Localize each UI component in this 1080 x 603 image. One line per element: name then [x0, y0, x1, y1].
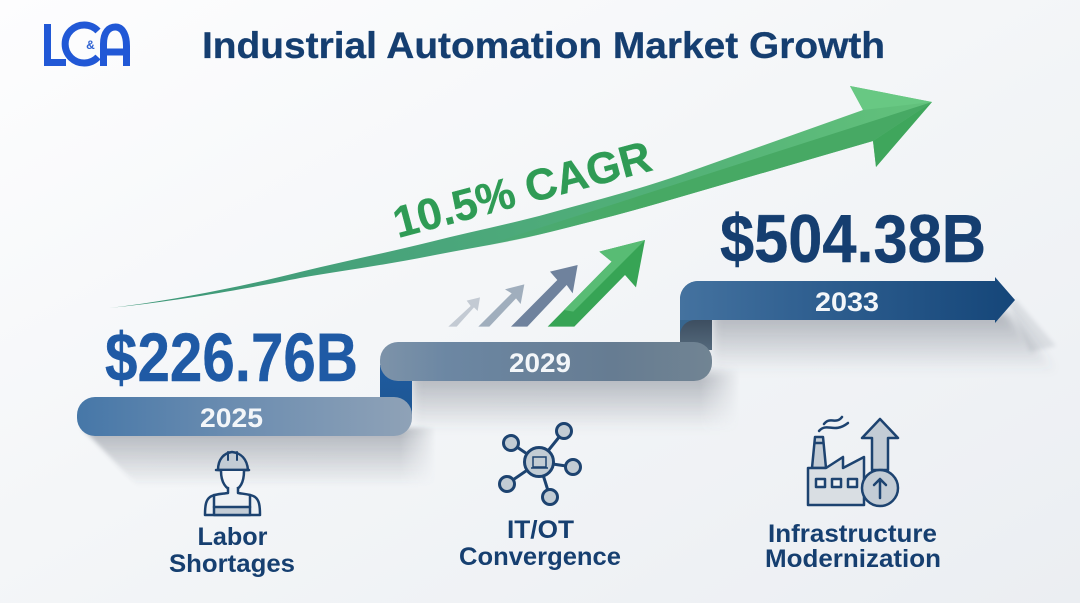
value 2033: $504.38B — [720, 201, 986, 277]
small rising arrows — [448, 240, 645, 327]
logo — [48, 24, 126, 66]
step connector 2029 to 2033 — [680, 281, 712, 350]
step arrow 2033: 2033 — [815, 287, 879, 317]
step bar 2025: 2025 — [200, 403, 263, 433]
step bar 2025 — [77, 397, 412, 436]
step bar 2029 — [380, 342, 712, 381]
label: IT/OT Convergence — [459, 516, 621, 571]
CAGR growth arrow — [109, 86, 932, 308]
step connector 2025 to 2029 — [380, 365, 412, 415]
label: Labor Shortages — [169, 523, 295, 578]
label: IT/OT Convergence: IT/OT — [507, 516, 574, 544]
title: Industrial Automation Market Growth — [202, 25, 885, 66]
logo: & — [86, 38, 95, 52]
label: Infrastructure Modernization: Infrastructure — [768, 520, 937, 548]
icon: network — [500, 424, 580, 504]
value 2025: $226.76B — [105, 319, 358, 396]
step arrow 2033 — [680, 277, 1015, 323]
label: IT/OT Convergence: Convergence — [459, 543, 621, 571]
label: Infrastructure Modernization — [765, 520, 941, 573]
label: Infrastructure Modernization: Modernization — [765, 545, 941, 573]
step bar 2029: 2029 — [509, 348, 571, 378]
label: Labor Shortages: Shortages — [169, 550, 295, 578]
CAGR label: 10.5% CAGR — [388, 132, 657, 248]
icon: worker — [205, 452, 260, 515]
label: Labor Shortages: Labor — [198, 523, 268, 551]
icon: factory with up arrow — [808, 417, 898, 506]
